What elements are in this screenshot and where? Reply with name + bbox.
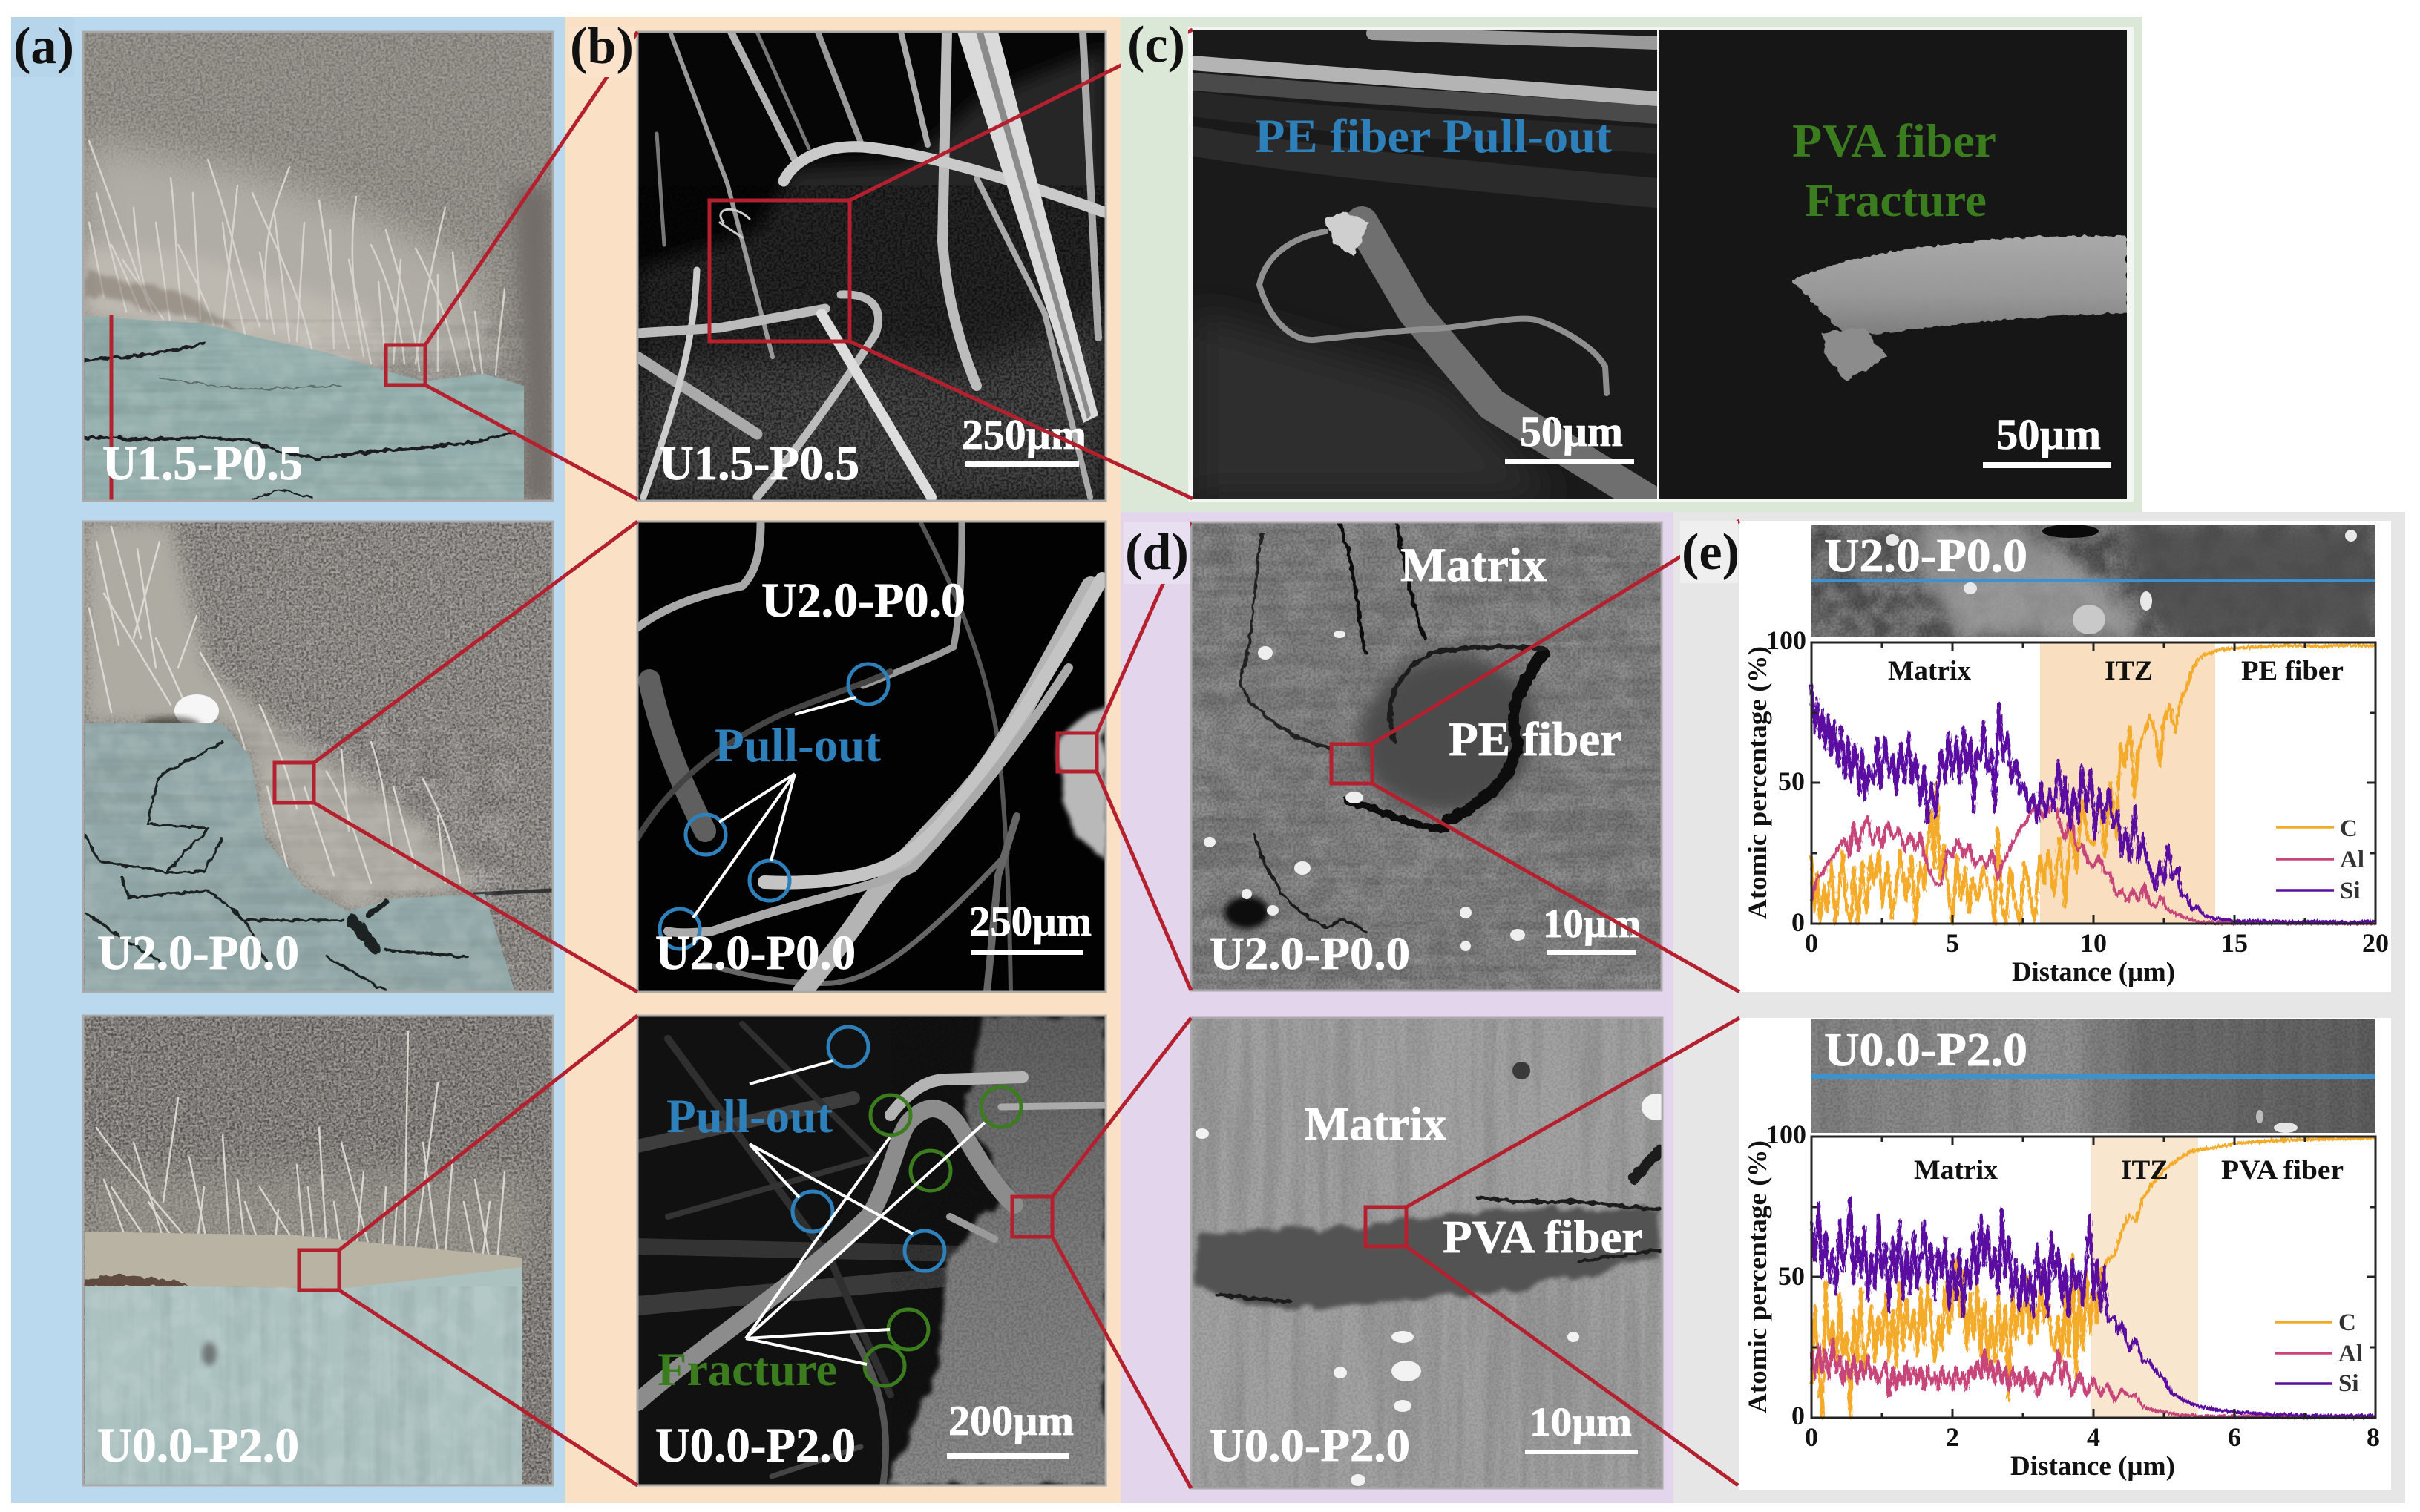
x tick labels: 5 [1946, 928, 1959, 958]
frame d1 [1191, 522, 1662, 990]
frame a2 [83, 522, 553, 992]
scale bar 50um: 50µm [1996, 410, 2101, 458]
label: U1.5-P0.5 [102, 436, 303, 490]
region labels: ITZ [2121, 1155, 2168, 1186]
x tick labels [1805, 928, 2389, 958]
legend [2276, 815, 2364, 904]
scale bar 10um: 10µm [1529, 1399, 1632, 1444]
scale bar 50um [1983, 410, 2111, 468]
x axis title: Distance (µm) [2012, 957, 2175, 987]
axes frame and ticks [1811, 1137, 2375, 1418]
x tick labels: 15 [2221, 928, 2248, 958]
y tick labels: 100 [1766, 1120, 1806, 1149]
ITZ band [2091, 1137, 2198, 1418]
specimen block [85, 723, 515, 992]
fracture label: Fracture [658, 1343, 837, 1396]
x tick labels: 0 [1805, 928, 1818, 958]
y axis title: Atomic percentage (%) [1742, 646, 1772, 919]
region labels: Matrix [1888, 656, 1971, 686]
panel tag (b): (b) [570, 18, 634, 75]
scale bar 50um [1505, 407, 1634, 464]
panel: e white card bottom [1739, 1018, 2391, 1490]
scan line [1811, 1074, 2375, 1079]
bottom label: U2.0-P0.0 [655, 926, 856, 980]
SEM: U0.0-P2.0 pull-out and fracture [637, 1016, 1106, 1485]
panel tag (a): (a) [13, 18, 74, 75]
axes frame and ticks [1811, 642, 2375, 924]
panel: c background [1121, 17, 2142, 512]
panel tag (c): (c) [1127, 16, 1185, 73]
sample label: U0.0-P2.0 [1210, 1421, 1410, 1471]
label Fracture: Fracture [1805, 174, 1987, 226]
x axis title: Distance (µm) [2010, 1451, 2175, 1482]
bottom label: U0.0-P2.0 [655, 1419, 856, 1473]
label: U0.0-P2.0 [1824, 1024, 2027, 1076]
scale bar 10um: 10µm [1543, 901, 1641, 946]
ITZ band [2040, 642, 2215, 924]
sample label: U2.0-P0.0 [761, 573, 965, 628]
label: PE fiber Pull-out [1255, 110, 1612, 163]
label Matrix: Matrix [1400, 539, 1547, 592]
panel: c white mat [1188, 27, 2134, 502]
scale bar 50um: 50µm [1520, 407, 1623, 456]
SEM: U1.5-P0.5 fibers [637, 32, 1106, 501]
cracks [85, 742, 468, 990]
region labels [1914, 1155, 2344, 1186]
EDS strip: U2.0-P0.0 line scan location [1811, 525, 2375, 637]
x tick labels: 20 [2362, 928, 2389, 958]
legend: Al [2340, 847, 2364, 873]
panel tag (d): (d) [1125, 524, 1189, 581]
cracks [85, 343, 515, 499]
specimen block [85, 1267, 522, 1485]
legend: C [2340, 815, 2358, 842]
frame a3 [83, 1016, 553, 1485]
frame b2 [637, 522, 1106, 992]
label: U2.0-P0.0 [97, 926, 299, 980]
blue circles [660, 664, 888, 949]
panel: d background [1121, 512, 1673, 1503]
y tick labels: 50 [1778, 1261, 1805, 1291]
BSE: U2.0-P0.0 cross-section PE fiber [1191, 522, 1662, 990]
x tick labels: 4 [2087, 1422, 2100, 1452]
SEM: U2.0-P0.0 pull-out fibers [637, 522, 1106, 992]
fiber hole [1342, 636, 1555, 832]
scan line [1811, 579, 2375, 582]
panel: e background [1673, 512, 2405, 1503]
series C, Al, Si [1811, 1138, 2375, 1418]
blue circles [793, 1027, 945, 1271]
label PVA fiber: PVA fiber [1792, 115, 1996, 167]
EDS strip: U0.0-P2.0 line scan location [1811, 1019, 2375, 1133]
zoom callouts: b to c and d [709, 30, 1193, 1488]
x tick labels: 8 [2367, 1422, 2380, 1452]
y tick labels: 50 [1778, 766, 1805, 796]
panel: a background [11, 17, 565, 1503]
chart: U2.0-P0.0 EDS line scan [1742, 625, 2389, 987]
chart: U0.0-P2.0 EDS line scan [1742, 1120, 2380, 1482]
y tick labels [1766, 625, 1806, 937]
x tick labels: 6 [2228, 1422, 2241, 1452]
BSE: U0.0-P2.0 cross-section PVA fiber [1191, 1018, 1671, 1488]
y tick labels: 0 [1791, 907, 1805, 937]
panel: e white card top [1739, 521, 2391, 992]
specimen block [85, 316, 524, 501]
frame b3 [637, 1016, 1106, 1485]
sample label: U2.0-P0.0 [1210, 929, 1410, 979]
scale bar 200um: 200µm [948, 1398, 1074, 1444]
label: U2.0-P0.0 [1824, 530, 2027, 582]
frame a1 [83, 32, 553, 501]
legend: Al [2338, 1341, 2363, 1367]
zoom callouts: a to b [275, 32, 637, 1485]
scale bar 250um: 250µm [969, 898, 1092, 945]
frame d2 [1191, 1018, 1662, 1488]
photo: specimen U2.0-P0.0 [83, 522, 553, 992]
region labels: ITZ [2105, 656, 2153, 686]
region labels [1888, 656, 2344, 686]
series C, Al, Si [1811, 645, 2375, 924]
y tick labels: 0 [1791, 1401, 1805, 1430]
photo: specimen U1.5-P0.5 [83, 32, 553, 501]
pull-out label: Pull-out [715, 719, 881, 772]
photo: specimen U0.0-P2.0 [83, 1016, 553, 1485]
SEM: PVA fiber fracture [1659, 30, 2127, 499]
zoom callouts: d to e [1331, 521, 1739, 1485]
red mark [110, 315, 113, 501]
label PVA fiber: PVA fiber [1443, 1212, 1643, 1263]
frame b1 [637, 32, 1106, 501]
y axis title: Atomic percentage (%) [1742, 1140, 1772, 1413]
x tick labels: 0 [1805, 1422, 1818, 1452]
y tick labels [1766, 1120, 1806, 1430]
region labels: Matrix [1914, 1155, 1998, 1186]
pull-out label: Pull-out [666, 1090, 833, 1143]
green circles [865, 1087, 1021, 1386]
label: U1.5-P0.5 [659, 436, 859, 490]
x tick labels: 2 [1946, 1422, 1959, 1452]
region labels: PE fiber [2241, 656, 2344, 686]
panel tag (e): (e) [1682, 524, 1739, 581]
leader lines [746, 1061, 985, 1364]
region labels: PVA fiber [2221, 1155, 2344, 1186]
y tick labels: 100 [1766, 625, 1806, 655]
legend [2275, 1309, 2363, 1397]
label PE fiber: PE fiber [1449, 713, 1621, 766]
legend: Si [2340, 878, 2361, 904]
x tick labels [1805, 1422, 2380, 1452]
legend: C [2338, 1309, 2356, 1336]
label: U0.0-P2.0 [97, 1419, 299, 1473]
legend: Si [2338, 1370, 2359, 1397]
panel: b background [565, 17, 1121, 1503]
scale bar 250um: 250µm [962, 412, 1086, 458]
leader lines [693, 697, 856, 918]
label Matrix: Matrix [1305, 1097, 1446, 1150]
x tick labels: 10 [2080, 928, 2107, 958]
SEM: PE fiber pull-out [1193, 30, 1657, 504]
